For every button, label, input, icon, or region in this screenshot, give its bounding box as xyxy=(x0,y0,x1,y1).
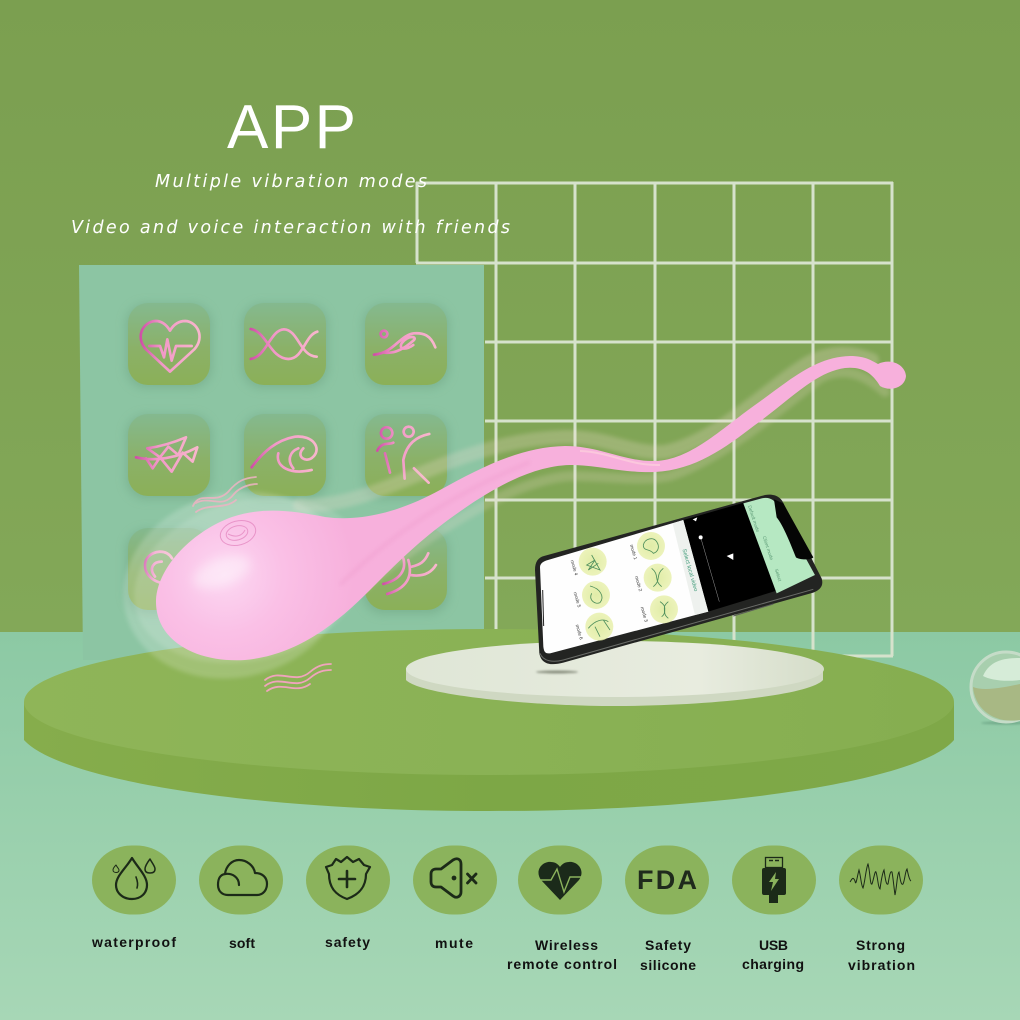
icon: heart with pulse xyxy=(538,862,583,900)
tab labels: Client mode xyxy=(762,535,774,561)
background floor xyxy=(0,632,1020,1020)
labels: waterproof xyxy=(91,934,176,950)
labels: remote control xyxy=(507,956,617,972)
labels: USB xyxy=(759,937,788,953)
title: APP xyxy=(227,93,356,162)
select strip xyxy=(673,520,708,615)
side slider xyxy=(541,590,545,626)
screen video area xyxy=(683,503,777,612)
ball highlight xyxy=(983,658,1020,681)
icon: heart pulse xyxy=(141,321,200,372)
wire grid xyxy=(416,182,893,656)
platform xyxy=(24,629,954,811)
ball lower refraction xyxy=(973,684,1020,721)
icon: pennants xyxy=(136,437,197,472)
feature badges xyxy=(91,846,923,973)
mode labels: mode 3 xyxy=(640,606,649,623)
icon: cloud xyxy=(218,860,267,895)
phone xyxy=(535,495,822,664)
mode labels xyxy=(570,544,649,641)
icon: muted speaker xyxy=(431,859,476,897)
tab labels: Default mode xyxy=(747,505,760,533)
mode labels: mode 4 xyxy=(570,560,579,576)
neck shading xyxy=(340,462,530,585)
body highlight xyxy=(189,549,255,595)
pink product with motion blur xyxy=(102,354,906,703)
ball body xyxy=(971,652,1020,722)
icon: splash xyxy=(383,553,436,594)
labels: silicone xyxy=(640,957,696,973)
mode glyphs on phone xyxy=(587,539,668,637)
panel: mode icons xyxy=(79,265,484,660)
labels: vibration xyxy=(848,957,915,973)
icon: USB plug xyxy=(762,858,786,903)
notch xyxy=(774,499,813,559)
icon: vibration waveform xyxy=(850,864,911,895)
vibration lines upper xyxy=(193,477,257,512)
icon: partly hidden spiral xyxy=(145,552,172,583)
mode labels: mode 1 xyxy=(629,544,638,561)
vibration lines lower xyxy=(265,664,331,691)
product body xyxy=(156,356,906,660)
tile shadows xyxy=(126,304,449,614)
icon: ocean wave xyxy=(252,437,317,471)
mode labels: mode 5 xyxy=(573,592,582,608)
subtitle: video and voice interaction: Video and voice interaction with friends xyxy=(71,218,510,238)
neck and tail halo xyxy=(300,354,885,590)
mint backing panel xyxy=(79,265,484,660)
power button xyxy=(218,517,258,549)
badge circles xyxy=(92,846,923,914)
icon: water drops xyxy=(113,858,155,899)
disc top xyxy=(406,641,824,697)
labels: soft xyxy=(229,935,255,951)
mode labels: mode 2 xyxy=(634,576,643,592)
labels: charging xyxy=(742,956,804,972)
labels: mute xyxy=(435,935,473,951)
phone side band xyxy=(540,589,813,661)
phone frame xyxy=(535,495,822,664)
platform side xyxy=(24,702,954,811)
motion ghost halos xyxy=(102,467,385,703)
labels: safety xyxy=(325,934,370,950)
icon: shield plus xyxy=(326,857,370,899)
tab labels xyxy=(747,505,783,583)
tiles xyxy=(128,303,447,610)
platform top xyxy=(24,629,954,775)
screen white xyxy=(540,520,708,653)
icon: FDA: FDA xyxy=(637,865,697,895)
tail highlight xyxy=(580,451,660,465)
buttons xyxy=(733,604,773,616)
disc side xyxy=(406,668,823,706)
icon: twist xyxy=(374,331,435,355)
phone shadow xyxy=(536,670,578,674)
video controls xyxy=(693,517,733,602)
mode glyphs xyxy=(136,321,436,594)
labels: Strong xyxy=(856,937,905,953)
background wall xyxy=(0,0,1020,634)
labels: Safety xyxy=(645,937,691,953)
labels xyxy=(91,934,915,973)
icon: crossing waves xyxy=(251,329,317,359)
mode labels: mode 6 xyxy=(575,624,584,641)
mode circles xyxy=(579,532,678,641)
tab labels: Select xyxy=(774,568,783,583)
ball shadow xyxy=(981,722,1020,724)
white disc xyxy=(406,641,824,706)
screen green tabs xyxy=(743,498,815,593)
select local video label: Select local video xyxy=(680,548,698,592)
labels: Wireless xyxy=(535,937,598,953)
subtitle: multiple vibration modes: Multiple vibration modes xyxy=(155,172,427,192)
glass ball xyxy=(971,652,1020,724)
icon: two figures xyxy=(377,427,429,483)
